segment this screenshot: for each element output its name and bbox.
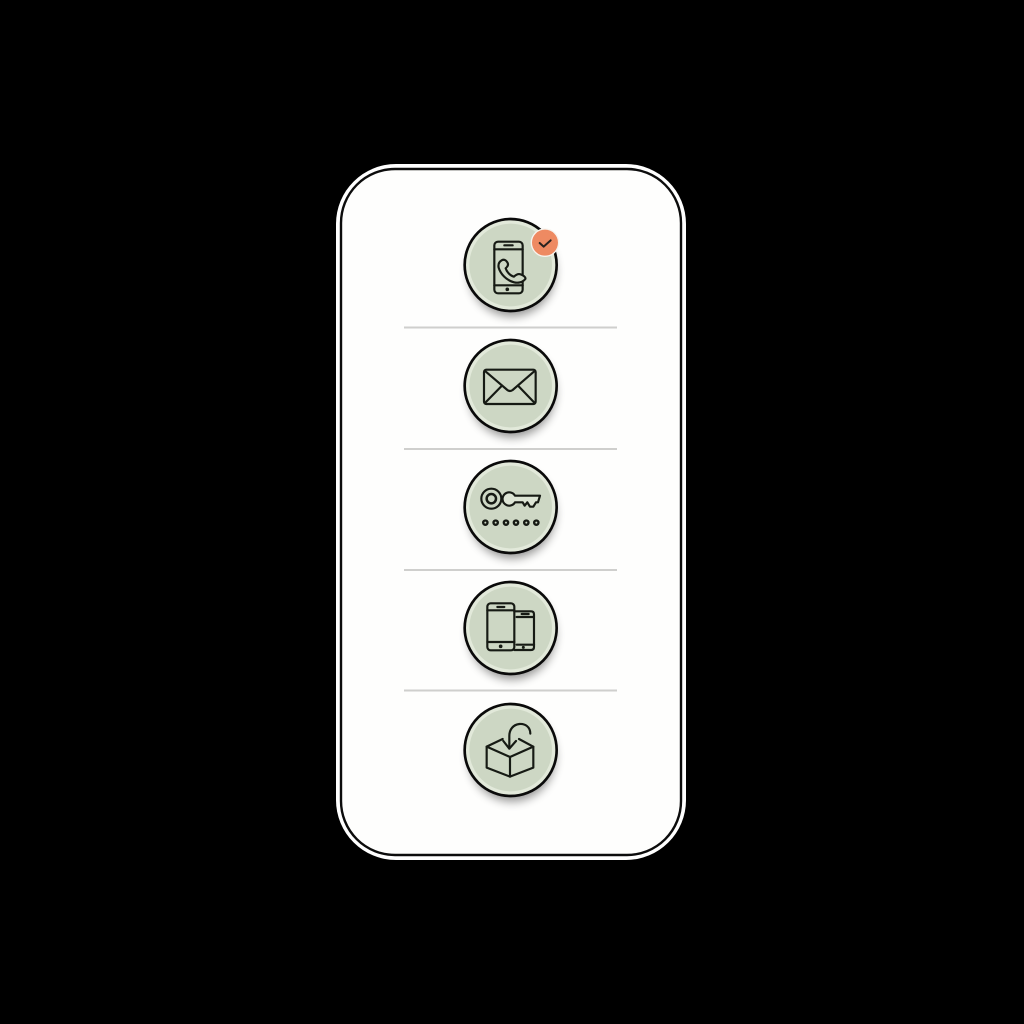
panel: rounded card [336,164,686,860]
passcode dots [483,520,538,525]
icon: envelope [465,340,557,437]
icon: orange check badge [531,229,559,256]
icon: phone call with check badge [465,219,559,316]
icon: two phones [465,582,557,679]
icon: open box with return arrow [465,704,557,801]
icon: key with passcode dots [465,461,557,558]
